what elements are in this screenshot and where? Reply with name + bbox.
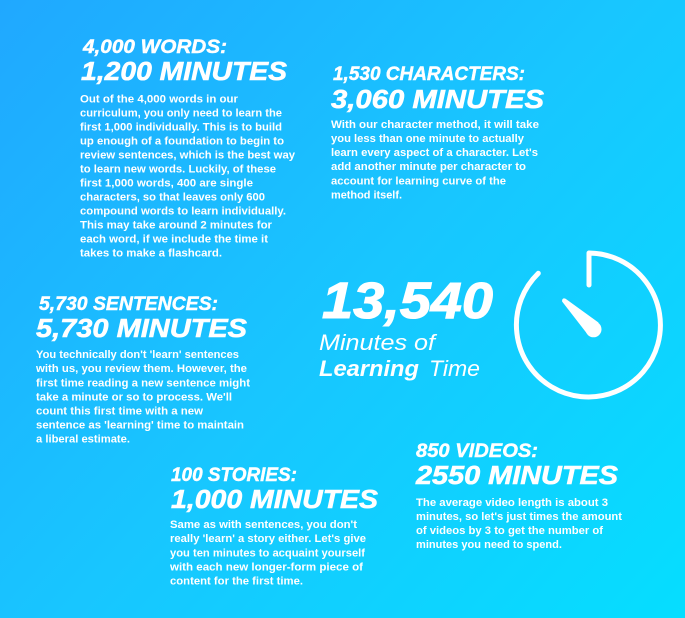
text block: words description: first 1,000 words, 400 are single [80,178,253,190]
text block: stories description: with each new longer-form piece of [169,562,363,574]
text block: sentences description: a liberal estimate. [36,434,130,446]
label: learning time: Time [429,356,480,381]
text block: words description: review sentences, which is the best way [80,150,296,162]
text block: sentences description: count this first time with a new [36,406,203,418]
text block: videos description: minutes you need to spend. [416,539,562,551]
text block: stories description: Same as with sentences, you don't [170,519,357,531]
panel: videos [415,440,622,551]
text block: sentences description: with us, you review them. However, the [35,363,247,375]
text block: characters description: learn every aspect of a character. Let's [331,147,538,159]
heading: 4,000 words: 4,000 WORDS: [82,36,227,58]
text block: characters description [331,119,539,202]
text block: videos description: The average video length is about 3 [416,497,608,509]
big number: 13,540: 13,540 [322,272,493,329]
label: minutes of: Minutes of [319,330,438,355]
text block: videos description: of videos by 3 to get the number of [416,525,603,537]
text block: words description: up enough of a foundation to begin to [80,136,284,148]
panel: stories [169,464,379,588]
text block: words description: This may take around 2 minutes for [80,220,273,232]
text block: videos description: minutes, so let's just times the amount [416,511,622,523]
label: learning time [319,356,480,381]
text block: characters description: With our character method, it will take [331,119,539,131]
text block: words description: each word, if we include the time it [80,234,268,246]
heading: 5,730 minutes: 5,730 MINUTES [36,313,248,343]
panel: total learning time [319,272,493,381]
label: learning time: Learning [319,356,420,381]
text block: stories description [169,519,366,588]
text block: words description [80,94,296,260]
text block: characters description: account for learning curve of the [331,176,506,188]
heading: 1,200 minutes: 1,200 MINUTES [81,56,288,86]
heading: 3,060 minutes: 3,060 MINUTES [331,84,545,114]
text block: sentences description: You technically don't 'learn' sentences [36,349,239,361]
text block: words description: first 1,000 individually. This is to build [80,122,282,134]
heading: 5,730 sentences: 5,730 SENTENCES: [39,293,218,315]
heading: 850 videos: 850 VIDEOS: [416,440,538,462]
heading: 100 stories: 100 STORIES: [171,464,297,486]
text block: sentences description: sentence as 'learning' time to maintain [36,420,244,432]
text block: characters description: you less than one minute to actually [331,133,525,145]
panel: words [80,36,296,260]
text block: videos description [416,497,622,551]
icon: stopwatch timer [516,253,660,397]
text block: characters description: add another minute per character to [331,161,526,173]
heading: 1,000 minutes: 1,000 MINUTES [171,484,379,514]
panel: sentences [35,293,250,446]
text block: sentences description: take a minute or so to process. We'll [36,392,232,404]
text block: stories description: you ten minutes to acquaint yourself [170,548,365,560]
text block: sentences description: first time reading a new sentence might [36,378,250,390]
text block: words description: curriculum, you only need to learn the [80,108,282,120]
text block: words description: to learn new words. Luckily, of these [80,164,276,176]
panel: characters [331,63,545,202]
text block: words description: characters, so that leaves only 600 [80,192,265,204]
text block: words description: compound words to learn individually. [80,206,286,218]
text block: sentences description [35,349,250,446]
text block: words description: takes to make a flashcard. [80,248,222,260]
text block: characters description: method itself. [331,190,402,202]
text block: words description: Out of the 4,000 words in our [80,94,239,106]
heading: 2550 minutes: 2550 MINUTES [415,460,619,490]
heading: 1,530 characters: 1,530 CHARACTERS: [333,63,525,85]
text block: stories description: content for the first time. [170,576,303,588]
text block: stories description: really 'learn' a story either. Let's give [170,533,366,545]
